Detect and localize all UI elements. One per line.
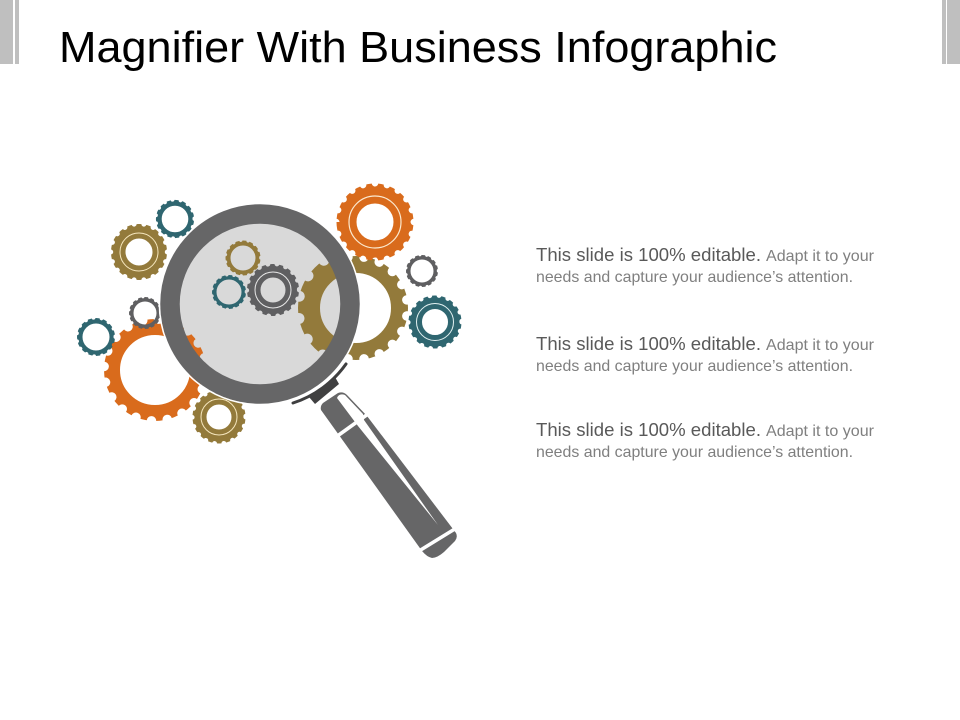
title: Magnifier With Business Infographic xyxy=(59,23,777,72)
gear: teal left xyxy=(80,321,112,353)
gear: small grey right xyxy=(408,257,436,285)
text block 3 xyxy=(536,419,875,461)
text block 2: Adapt it to your xyxy=(766,337,875,354)
magnifier ring xyxy=(159,203,361,405)
text block 1: This slide is 100% editable. xyxy=(536,244,761,265)
handle band upper xyxy=(336,414,368,437)
corner bars: left xyxy=(0,0,19,64)
gear: large orange xyxy=(112,327,198,413)
handle body xyxy=(321,392,457,558)
text block 2: This slide is 100% editable. xyxy=(536,333,761,354)
outside the lens xyxy=(346,256,408,360)
gear: large gold xyxy=(309,262,401,354)
text block 3: needs and capture your audience’s attention. xyxy=(536,444,853,461)
text block 2: needs and capture your audience’s attention. xyxy=(536,358,853,375)
magnifier xyxy=(159,203,458,558)
gear: teal right xyxy=(415,302,455,342)
corner bars: right xyxy=(942,0,960,64)
text block 2 xyxy=(536,333,875,375)
text block 1: Adapt it to your xyxy=(766,248,875,265)
gear in lens: teal xyxy=(214,277,244,307)
text block 3: Adapt it to your xyxy=(766,423,875,440)
magnified inside the lens xyxy=(298,262,336,352)
gear: small teal top xyxy=(159,203,191,235)
gear: gold bottom xyxy=(200,398,238,436)
magnifier lens glass xyxy=(178,222,342,386)
text block 3: This slide is 100% editable. xyxy=(536,419,761,440)
gear in lens: grey xyxy=(254,271,292,309)
gear: orange top xyxy=(346,194,404,250)
collar arc xyxy=(293,364,346,403)
gear: gold left xyxy=(118,231,160,273)
gear: small grey left xyxy=(131,299,159,327)
handle band lower xyxy=(419,527,458,551)
handle neck xyxy=(309,377,339,404)
gear in lens: gold xyxy=(228,243,258,273)
text block 1: needs and capture your audience’s attention. xyxy=(536,269,853,286)
handle highlight xyxy=(337,394,438,525)
text block 1 xyxy=(536,244,875,286)
